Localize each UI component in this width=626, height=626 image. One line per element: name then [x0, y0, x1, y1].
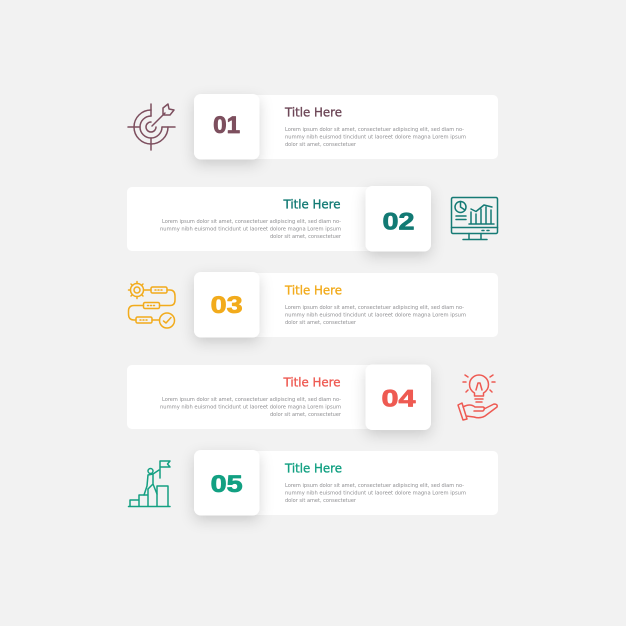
panel: step 01 [128, 94, 498, 160]
title 03: Title Here [284, 284, 342, 298]
card 05 [200, 451, 498, 515]
icon: monitor with charts [452, 198, 498, 240]
panel: step 03 [128, 272, 498, 338]
number box 04 [366, 364, 431, 430]
title 02: Title Here [283, 198, 340, 212]
title 04: Title Here [283, 376, 340, 390]
title 01: Title Here [284, 106, 342, 120]
text 04: Lorem ipsum dolor sit amet, consectetuer adipiscing elit, sed diam no- [162, 397, 341, 403]
number box 01 [194, 94, 260, 160]
text 02: dolor sit amet, consectetuer [270, 234, 342, 240]
text 03: dolor sit amet, consectetuer [285, 320, 357, 326]
number box 01: 01 [213, 112, 240, 139]
text 02: nummy nibh euismod tincidunt ut laoreet dolore magna Lorem ipsum [160, 226, 341, 232]
icon: process flow [128, 282, 175, 328]
panel: step 02 [127, 186, 498, 252]
text 04 [160, 397, 342, 418]
icon: climber with flag on steps [128, 461, 170, 506]
text 02: Lorem ipsum dolor sit amet, consectetuer adipiscing elit, sed diam no- [162, 219, 341, 225]
text 03 [285, 305, 466, 326]
text 03: Lorem ipsum dolor sit amet, consectetuer adipiscing elit, sed diam no- [285, 305, 464, 311]
text 01: dolor sit amet, consectetuer [285, 142, 357, 148]
number box 03: 03 [211, 292, 243, 319]
text 05: nummy nibh euismod tincidunt ut laoreet dolore magna Lorem ipsum [285, 490, 466, 496]
text 05: dolor sit amet, consectetuer [285, 498, 357, 504]
text 02 [160, 219, 342, 240]
card 02 [127, 187, 425, 251]
number box 05: 05 [211, 471, 243, 498]
text 04: dolor sit amet, consectetuer [270, 412, 342, 418]
text 05 [285, 483, 466, 504]
number box 02 [366, 186, 431, 252]
text 05: Lorem ipsum dolor sit amet, consectetuer adipiscing elit, sed diam no- [285, 483, 464, 489]
text 04: nummy nibh euismod tincidunt ut laoreet dolore magna Lorem ipsum [160, 404, 341, 410]
panel: step 04 [127, 364, 497, 430]
text 01: nummy nibh euismod tincidunt ut laoreet dolore magna Lorem ipsum [285, 134, 466, 140]
card 04 [127, 365, 425, 429]
number box 03 [194, 272, 260, 338]
number box 02: 02 [382, 208, 414, 236]
icon: target with arrow [128, 104, 175, 150]
number box 05 [194, 450, 260, 516]
text 01 [285, 127, 466, 148]
panel: step 05 [128, 450, 498, 516]
card 03 [200, 273, 498, 337]
number box 04: 04 [382, 386, 416, 412]
card 01 [200, 95, 498, 159]
title 05: Title Here [284, 462, 342, 476]
text 03: nummy nibh euismod tincidunt ut laoreet dolore magna Lorem ipsum [285, 312, 466, 318]
icon: light bulb over hand [458, 375, 497, 420]
text 01: Lorem ipsum dolor sit amet, consectetuer adipiscing elit, sed diam no- [285, 127, 464, 133]
